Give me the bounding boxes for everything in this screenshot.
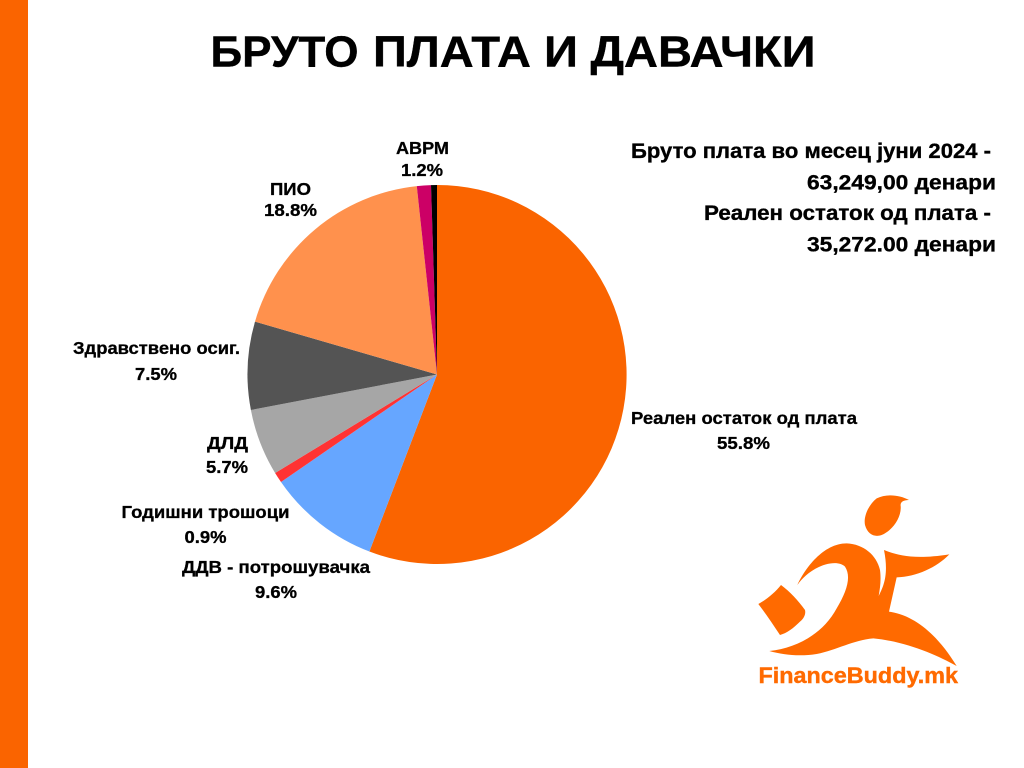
title: ДАВАЧКИ bbox=[590, 28, 816, 76]
label: ДДВ - потрошувачка: 9.6% bbox=[255, 582, 297, 602]
label: АВРМ: 1.2% bbox=[401, 160, 443, 180]
label: Реален остаток од плата bbox=[631, 408, 857, 453]
pie chart bbox=[248, 185, 627, 564]
label: Годишни трошоци: Годишни трошоци bbox=[122, 502, 290, 522]
label: АВРМ: АВРМ bbox=[396, 138, 449, 158]
label: ДЛД bbox=[206, 433, 249, 477]
label: Реален остаток од плата: 55.8% bbox=[717, 433, 770, 453]
summary text block bbox=[631, 140, 996, 256]
summary text block: Реален остаток од плата - bbox=[704, 202, 991, 225]
label: ДДВ - потрошувачка bbox=[182, 557, 370, 602]
summary text block: 35,272.00 денари bbox=[807, 234, 996, 256]
logo: FinanceBuddy.mk bbox=[758, 495, 959, 688]
label: ДДВ - потрошувачка: ДДВ - потрошувачка bbox=[182, 557, 370, 577]
label: Годишни трошоци: 0.9% bbox=[184, 527, 227, 547]
label: ДЛД: 5.7% bbox=[206, 457, 248, 477]
label: ДЛД: ДЛД bbox=[207, 433, 249, 453]
left orange stripe bbox=[0, 0, 28, 768]
slice: ДДВ - потрошувачка bbox=[281, 374, 437, 552]
slice: Здравствено осиг. bbox=[248, 322, 437, 410]
label: Годишни трошоци bbox=[122, 502, 290, 547]
label: АВРМ bbox=[396, 138, 449, 180]
label: ПИО: 18.8% bbox=[264, 200, 317, 220]
summary text block: 63,249,00 денари bbox=[807, 172, 996, 194]
slice: ПИО bbox=[255, 186, 437, 374]
icon: running figure bbox=[758, 495, 957, 666]
label: Здравствено осиг. bbox=[73, 338, 240, 384]
title: ПЛАТА bbox=[373, 28, 531, 76]
label: Здравствено осиг.: 7.5% bbox=[135, 364, 177, 384]
label: Реален остаток од плата: Реален остаток од плата bbox=[631, 408, 857, 428]
body bbox=[769, 543, 957, 666]
summary text block: Бруто плата во месец јуни 2024 - bbox=[631, 140, 991, 163]
label: ПИО: ПИО bbox=[270, 179, 311, 199]
logo wordmark: FinanceBuddy.mk bbox=[758, 663, 959, 688]
slice: Годишни трошоци bbox=[275, 374, 437, 482]
slice: ДЛД bbox=[251, 374, 437, 473]
briefcase bbox=[758, 585, 805, 635]
slice: АВРМ bbox=[417, 185, 437, 374]
label: ПИО bbox=[264, 179, 317, 220]
slice: remainder bbox=[431, 185, 437, 374]
title: И bbox=[544, 28, 578, 76]
title: БРУТО bbox=[210, 28, 358, 76]
head bbox=[865, 495, 909, 536]
title bbox=[210, 28, 816, 76]
label: Здравствено осиг.: Здравствено осиг. bbox=[73, 338, 240, 358]
slice: Реален остаток од плата bbox=[369, 185, 627, 564]
